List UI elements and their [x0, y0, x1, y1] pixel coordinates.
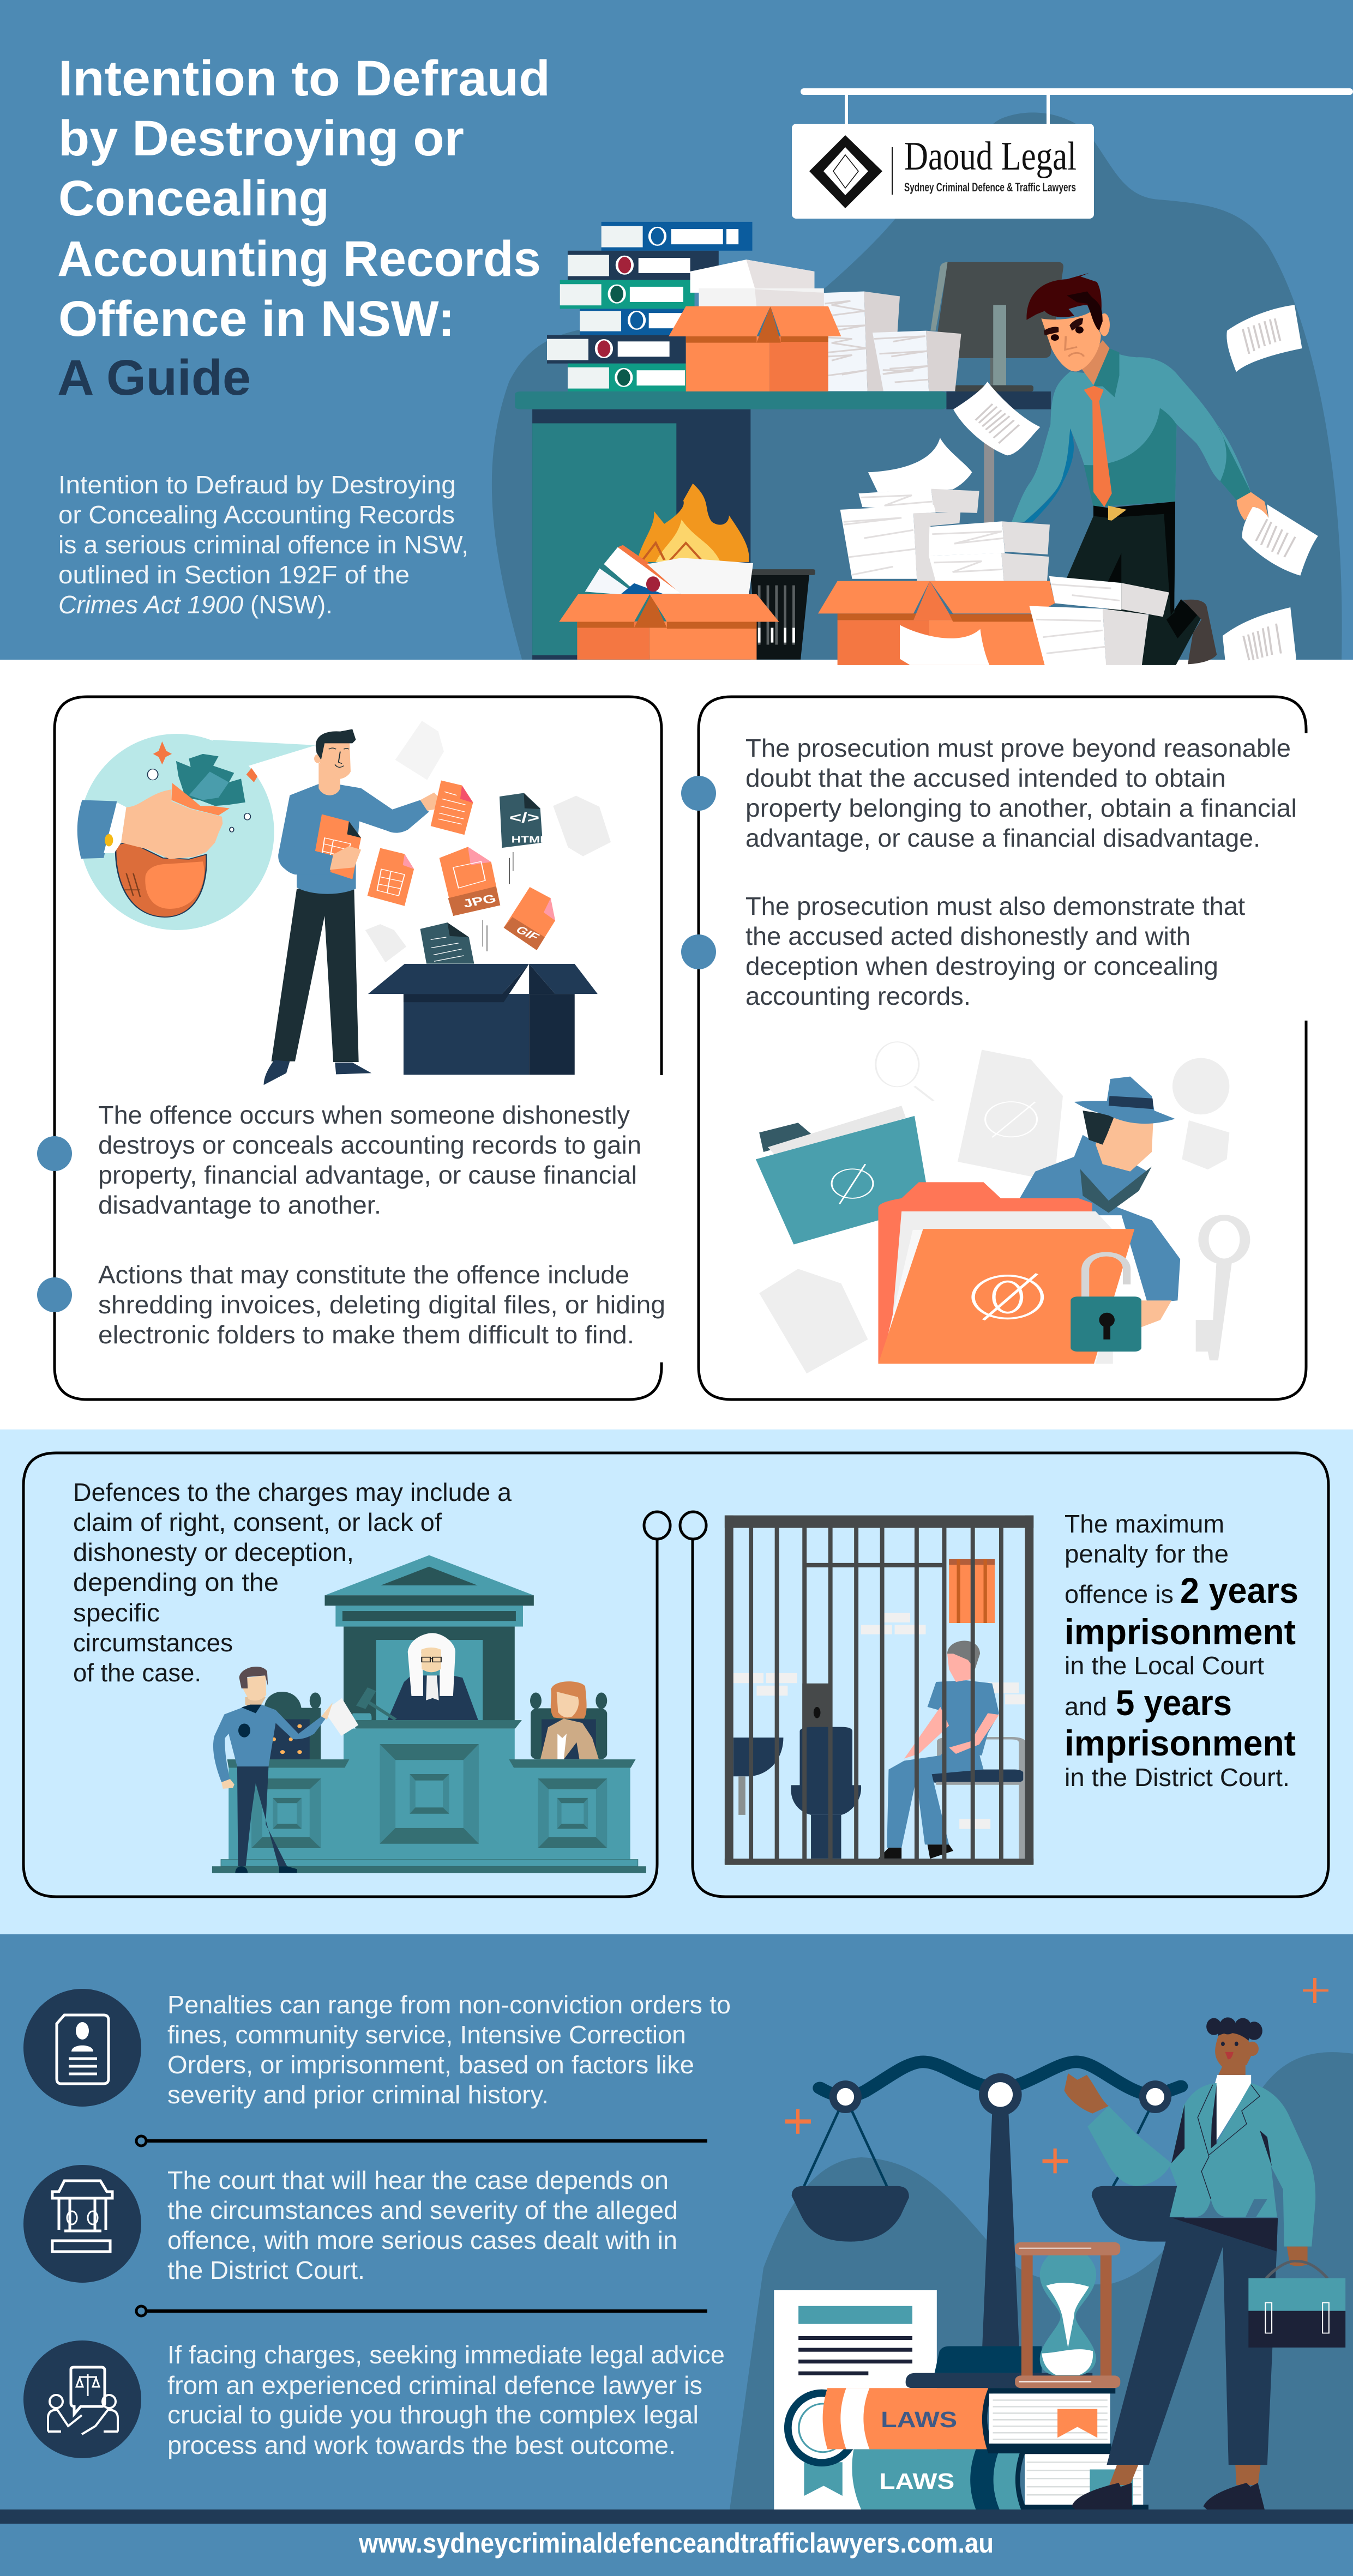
center panel [380, 1744, 479, 1844]
dot [681, 934, 716, 969]
title: by Destroying or [58, 111, 464, 166]
man, papers and floor box [818, 273, 1318, 665]
hand [1237, 492, 1268, 521]
text: actions [98, 1260, 665, 1349]
window [949, 1559, 995, 1623]
detective [1020, 1077, 1180, 1330]
books: LAWS [879, 2469, 954, 2494]
dot [37, 1136, 72, 1171]
police officer [213, 1667, 358, 1873]
trousers [272, 889, 359, 1062]
necktie [1084, 386, 1112, 507]
hair [1206, 2017, 1262, 2046]
divider [136, 2136, 707, 2146]
bench [212, 1720, 646, 1873]
icon: hourglass [1015, 2242, 1120, 2388]
text: actions: shredding invoices, deleting digital files, or hiding [98, 1290, 665, 1319]
text: court: The court that will hear the case depends on [167, 2166, 669, 2194]
background blob [492, 112, 1342, 660]
shoes [264, 1060, 371, 1085]
text: dishonesty: accounting records. [745, 982, 971, 1010]
jacket [1087, 2083, 1315, 2247]
icon: courthouse scales [23, 2165, 141, 2283]
judge [388, 1633, 478, 1720]
monitor and desk paper stacks [818, 262, 1063, 392]
text: court [167, 2166, 678, 2284]
panel outline [23, 1453, 1328, 1897]
text: maximum penalty [1065, 1510, 1298, 1791]
text: offence definition [98, 1101, 641, 1219]
text: advice: process and work towards the best outcome. [167, 2431, 676, 2459]
intro text: outlined in Section 192F of the [58, 560, 410, 589]
text: maximum penalty: in the Local Court [1065, 1651, 1264, 1680]
neck [1080, 340, 1110, 385]
title: A Guide [57, 350, 251, 406]
desk, box, bin and fire [515, 260, 1051, 660]
panel: penalties and advice [23, 1989, 731, 2459]
icon: padlock [1071, 1254, 1141, 1352]
icon: plus marks [785, 2109, 1068, 2173]
books: LAWS [881, 2408, 957, 2432]
text: burden of proof: property belonging to another, obtain a financial [745, 794, 1297, 822]
illustration: lawyer with scales [730, 2017, 1353, 2509]
left panel [251, 1778, 321, 1848]
text: offence definition: disadvantage to another. [98, 1191, 381, 1219]
text: dishonesty: The prosecution must also demonstrate that [745, 892, 1245, 920]
coat [1020, 1135, 1180, 1303]
title: Offence in NSW: [58, 291, 455, 347]
sign board [792, 124, 1094, 219]
panel: offence conduct [37, 697, 665, 1399]
wall bricks [733, 1613, 1033, 1829]
text: advice [167, 2340, 725, 2459]
footer bar [0, 2509, 1353, 2524]
right panel [538, 1778, 607, 1848]
belt [1093, 502, 1175, 518]
icon: waste bin [747, 569, 815, 660]
text: maximum penalty: imprisonment [1065, 1612, 1296, 1652]
intro text: Crimes Act 1900 (NSW). [58, 590, 333, 619]
trousers [1107, 2218, 1278, 2465]
icon: document files: HTML [512, 835, 548, 845]
neck and face [318, 762, 340, 795]
text: court: the circumstances and severity of the alleged [167, 2196, 678, 2224]
face details [1044, 318, 1083, 335]
side chairs [264, 1692, 607, 1759]
icon: open box [368, 964, 598, 1075]
logo mark [809, 135, 893, 208]
text: defences: specific [73, 1598, 160, 1627]
icon: fire [637, 484, 749, 562]
text: penalties: Orders, or imprisonment, based on factors like [167, 2050, 694, 2079]
title: Accounting Records [57, 231, 541, 287]
text: maximum penalty: and [1065, 1692, 1107, 1721]
shirt shadow [1084, 408, 1251, 507]
text: defences: circumstances [73, 1628, 233, 1657]
text: dishonesty [745, 892, 1245, 1010]
trousers [1065, 512, 1203, 665]
text: penalties [167, 1990, 731, 2109]
icon: burning box [559, 545, 779, 660]
ring [680, 1512, 706, 1539]
illustration: man sorting files [77, 721, 611, 1085]
shirt [1012, 354, 1251, 522]
trouser fold [1108, 512, 1198, 638]
face details [329, 748, 349, 767]
icon: binder stack [547, 222, 753, 391]
forearm [278, 845, 333, 874]
text: defences: depending on the [73, 1568, 279, 1596]
lower book [852, 2449, 1021, 2509]
icon: plus mark top right [1303, 1978, 1328, 2003]
text: court: the District Court. [167, 2256, 365, 2284]
hair [1026, 273, 1102, 331]
title: Concealing [58, 171, 329, 226]
text: dishonesty: the accused acted dishonestly and with [745, 922, 1190, 950]
bed frame [928, 1738, 1023, 1859]
icon: criminal record [23, 1989, 141, 2107]
sweater [278, 784, 429, 894]
illustration: prisoner in cell [725, 1516, 1033, 1865]
text: maximum penalty: in the District Court. [1065, 1763, 1290, 1791]
illustration: detective with folders [756, 1042, 1245, 1373]
sign hanger [801, 88, 1353, 125]
icon: big paper pile [840, 438, 1050, 581]
mouth [1225, 2052, 1234, 2059]
icon: orange box on desk [669, 306, 841, 391]
lawyer [1065, 2017, 1345, 2509]
text: court: offence, with more serious cases dealt with in [167, 2226, 677, 2254]
hand [1134, 1300, 1171, 1330]
icon: flying papers [953, 305, 1318, 665]
text: dishonesty: deception when destroying or concealing [745, 952, 1218, 980]
panel outline [699, 697, 1306, 1399]
text: actions: electronic folders to make them difficult to find. [98, 1320, 634, 1349]
logo text: Daoud Legal [904, 134, 1077, 179]
text: defences: dishonesty or deception, [73, 1538, 354, 1566]
toilet and sink [733, 1684, 861, 1859]
text: defences: claim of right, consent, or lack of [73, 1508, 442, 1536]
prisoner [878, 1641, 999, 1859]
title: Intention to Defraud [58, 51, 550, 106]
icon: papers behind desk box [690, 260, 824, 307]
text: burden of proof: advantage, or cause a financial disadvantage. [745, 824, 1260, 852]
panel: hero background and binders [492, 112, 1342, 660]
icon: grey papers [365, 721, 611, 962]
briefcase [1266, 2261, 1327, 2278]
title [57, 51, 550, 406]
text: advice: If facing charges, seeking immediate legal advice [167, 2340, 725, 2369]
head [1041, 312, 1101, 371]
books [823, 2388, 1148, 2509]
icon: paper stacks on desk [818, 292, 961, 391]
intro text: Intention to Defraud by Destroying [58, 470, 456, 499]
text: advice: from an experienced criminal defence lawyer is [167, 2371, 702, 2399]
neck and head [1215, 2031, 1252, 2075]
icon: teal folder [756, 1106, 930, 1245]
text: actions: Actions that may constitute the offence include [98, 1260, 629, 1289]
text: advice: crucial to guide you through the complex legal [167, 2400, 699, 2429]
dot [681, 776, 716, 811]
face [1096, 1106, 1153, 1172]
text: offence definition: property, financial advantage, or cause financial [98, 1161, 637, 1189]
gavel [351, 1687, 397, 1721]
jacket shadows [1171, 2085, 1272, 2167]
man [1012, 273, 1268, 665]
text: offence definition: destroys or conceals accounting records to gain [98, 1131, 641, 1159]
hair [1083, 1111, 1115, 1145]
shoe [1183, 600, 1217, 664]
text: maximum penalty: The maximum [1065, 1510, 1224, 1538]
collar [1080, 1167, 1152, 1213]
intro text [58, 470, 468, 619]
text: penalties: severity and prior criminal history. [167, 2080, 549, 2109]
upper book [823, 2388, 988, 2449]
desk [515, 391, 1051, 660]
text: defences: of the case. [73, 1658, 201, 1687]
text: maximum penalty: imprisonment [1065, 1723, 1296, 1763]
hands [330, 793, 441, 870]
motion lines [483, 852, 513, 951]
icon: grey background items [759, 1042, 1245, 1373]
underarm shadow [1024, 429, 1074, 522]
text: burden of proof [745, 734, 1297, 852]
text: defences [73, 1478, 512, 1687]
text: burden of proof: doubt that the accused intended to obtain [745, 764, 1226, 792]
hat [906, 2346, 1092, 2388]
icon: document files: </> [509, 810, 539, 825]
text: maximum penalty: 5 years [1116, 1682, 1232, 1723]
panel: defences and penalty [23, 1453, 1328, 1897]
icon: document files [368, 780, 555, 964]
feet [1109, 2465, 1260, 2485]
legal certificate [774, 2290, 937, 2509]
seal and ribbon [784, 2390, 859, 2496]
money bag bubble [77, 734, 316, 930]
panel outline [55, 697, 662, 1399]
shirt [1214, 2075, 1251, 2144]
hair [316, 729, 356, 760]
dot [37, 1277, 72, 1312]
monitor [930, 262, 1063, 392]
icon: document files: JPG [461, 892, 498, 910]
ring [644, 1512, 670, 1539]
orange file held [312, 814, 361, 879]
man [264, 729, 441, 1085]
icon: legal consultation [23, 2340, 141, 2458]
text: penalties: fines, community service, Intensive Correction [167, 2020, 686, 2049]
divider [136, 2306, 707, 2316]
shoes [1072, 2483, 1265, 2509]
courthouse top [324, 1555, 534, 1722]
collar [1070, 348, 1119, 397]
text: maximum penalty: offence is [1065, 1580, 1174, 1608]
desk leg [984, 441, 994, 524]
intro text: or Concealing Accounting Records [58, 500, 455, 529]
icon: document files: GIF [513, 924, 543, 943]
background hills [730, 2052, 1353, 2509]
hand [1065, 2073, 1109, 2114]
intro text: is a serious criminal offence in NSW, [58, 530, 468, 559]
woman [540, 1681, 599, 1759]
text: offence definition: The offence occurs when someone dishonestly [98, 1101, 630, 1129]
illustration: courtroom [212, 1555, 646, 1873]
logo tagline: Sydney Criminal Defence & Traffic Lawyers [904, 180, 1076, 194]
panel: prosecution [681, 697, 1306, 1399]
scales of justice [792, 2062, 1184, 2346]
hat [1074, 1077, 1175, 1124]
text: maximum penalty: 2 years [1180, 1570, 1298, 1610]
text: defences: Defences to the charges may include a [73, 1478, 512, 1506]
icon: paper stack on floor [1030, 576, 1169, 665]
icon: orange box on floor [818, 581, 1055, 665]
footer URL: www.sydneycriminaldefenceandtrafficlawyers.com.au [358, 2527, 994, 2559]
icon: orange folder [878, 1182, 1134, 1364]
text: penalties: Penalties can range from non-conviction orders to [167, 1990, 731, 2019]
text: burden of proof: The prosecution must prove beyond reasonable [745, 734, 1291, 762]
logo sign [792, 88, 1353, 219]
bars [725, 1516, 1033, 1865]
text: maximum penalty: penalty for the [1065, 1540, 1229, 1568]
hand holding case [1287, 2247, 1308, 2266]
